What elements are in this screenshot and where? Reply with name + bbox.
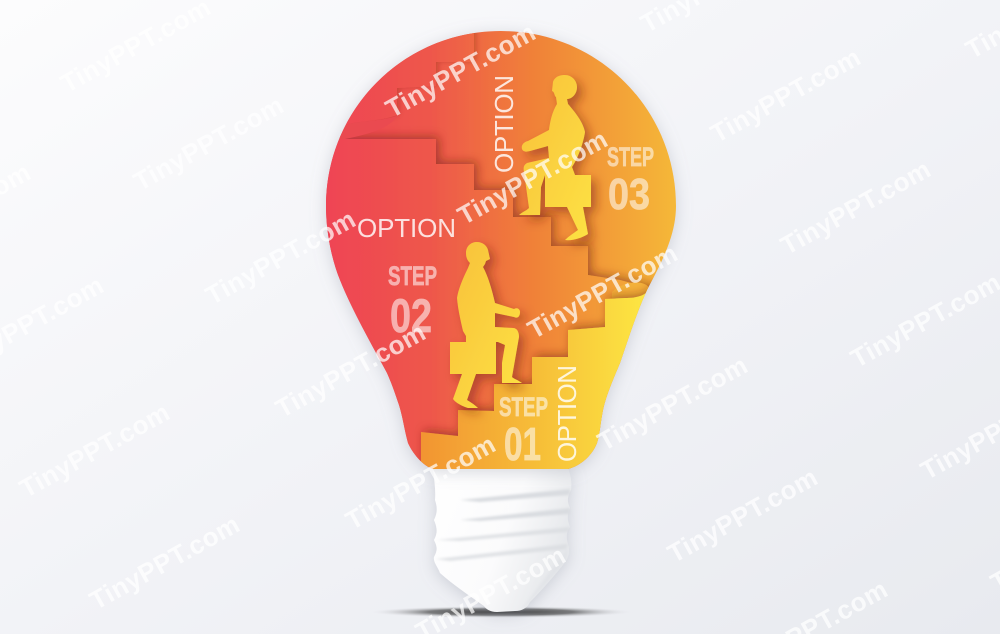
watermarks: TinyPPT.com — [380, 17, 541, 124]
watermarks: TinyPPT.com — [592, 350, 753, 457]
step 03: STEP — [607, 142, 654, 172]
ground shadow — [369, 606, 633, 618]
watermarks: TinyPPT.com — [84, 509, 245, 616]
step 02: STEP — [388, 261, 437, 291]
watermarks: TinyPPT.com — [522, 238, 683, 345]
watermarks: TinyPPT.com — [662, 462, 823, 569]
step 02: 02 — [390, 289, 432, 342]
watermarks: TinyPPT.com — [270, 317, 431, 424]
step 03 — [607, 142, 654, 219]
lower paper staircase — [421, 288, 660, 480]
step 01 — [499, 392, 548, 470]
lightbulb glass — [320, 10, 676, 480]
step 03: 03 — [608, 170, 650, 219]
label: option vertical lower: OPTION — [552, 365, 582, 462]
lamp socket — [433, 468, 571, 612]
staircase curl — [337, 116, 397, 139]
upper paper staircase — [346, 32, 478, 125]
watermarks: TinyPPT.com — [775, 154, 936, 261]
person: lower walker with briefcase — [450, 242, 522, 408]
watermarks: TinyPPT.com — [14, 397, 175, 504]
step 01: 01 — [504, 418, 541, 470]
label: option vertical upper: OPTION — [489, 75, 519, 173]
middle paper staircase — [320, 139, 650, 480]
watermarks: TinyPPT.com — [128, 90, 289, 197]
lower staircase curl — [612, 282, 649, 299]
step 02 — [388, 261, 437, 342]
watermarks: TinyPPT.com — [340, 429, 501, 536]
label: option horizontal: OPTION — [357, 213, 456, 243]
watermarks: TinyPPT.com — [200, 204, 361, 311]
watermarks: TinyPPT.com — [705, 42, 866, 149]
watermarks: TinyPPT.com — [452, 124, 613, 231]
person: upper walker with briefcase — [519, 75, 591, 240]
step 01: STEP — [499, 392, 548, 422]
